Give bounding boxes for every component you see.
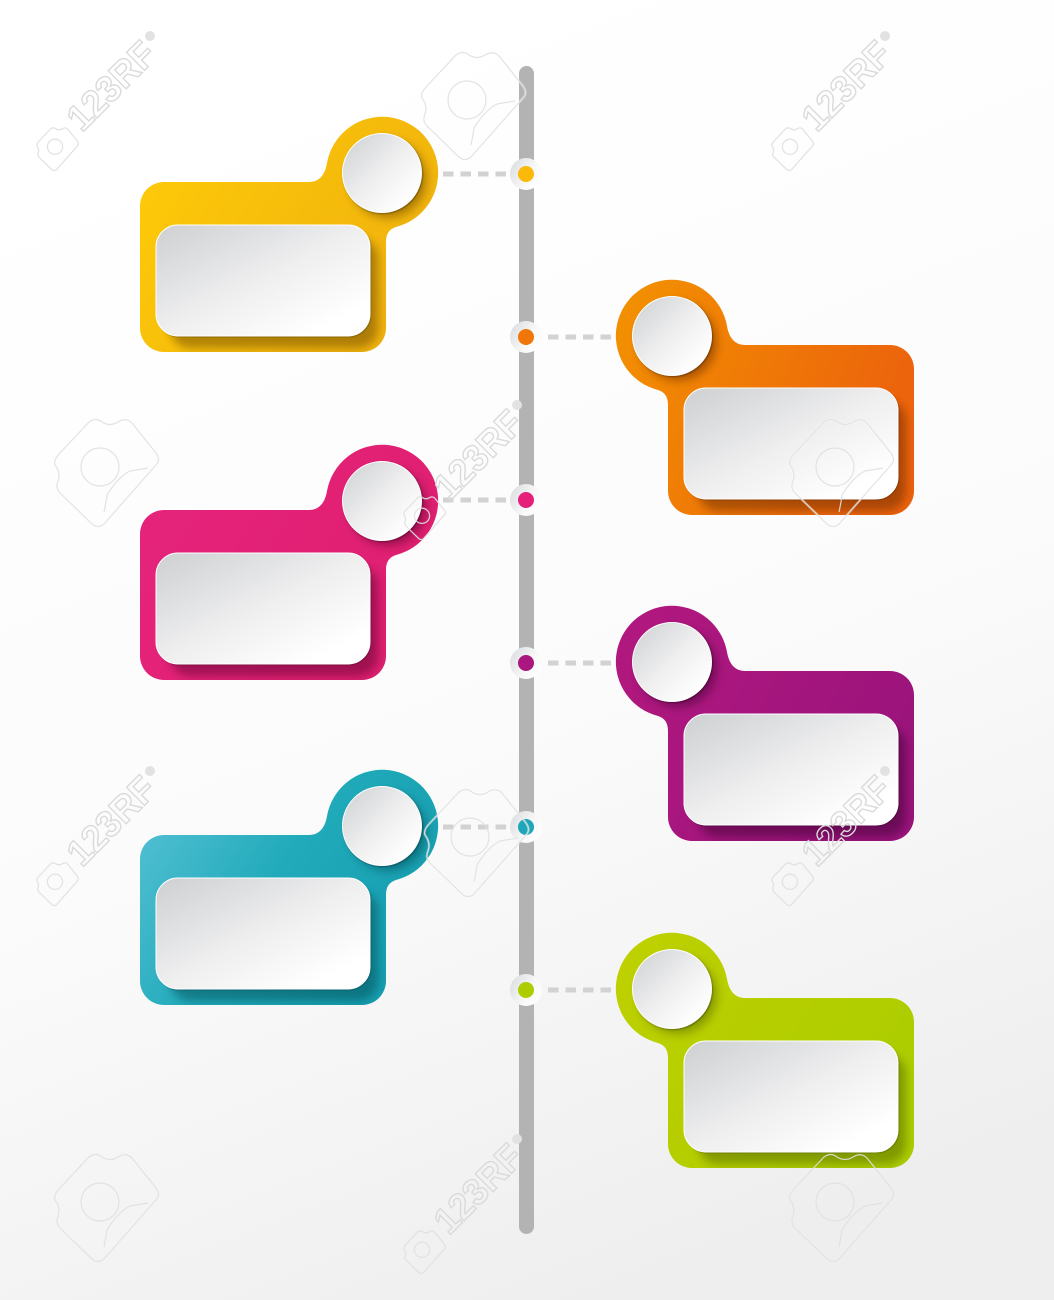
connector: orange: [548, 334, 612, 340]
watermark: stamp centre lower: [425, 790, 528, 896]
watermark: logo lower left: [37, 766, 164, 906]
watermark: stamp top centre: [422, 52, 526, 160]
panel: teal card: [140, 770, 438, 1005]
panel: orange card: [616, 280, 914, 515]
panel: pink card: [140, 445, 438, 680]
text box: pink: [156, 553, 370, 664]
text box: purple: [684, 714, 898, 825]
watermark: stamp bottom right: [790, 1154, 894, 1262]
watermark: logo centre: 123RF: [426, 402, 531, 508]
number circle: purple: [632, 622, 712, 702]
watermark: logo top right: 123RF: [794, 33, 899, 139]
watermark: stamp left: [55, 420, 158, 526]
timeline node: orange: [510, 321, 542, 353]
timeline node: purple: [510, 647, 542, 679]
text box: yellow: [156, 225, 370, 336]
connector: green: [548, 988, 612, 992]
timeline node: yellow: [510, 158, 542, 190]
text box: green: [684, 1041, 898, 1152]
connector: yellow: [443, 172, 507, 176]
watermark: logo top left: [37, 31, 164, 171]
timeline node: green: [510, 974, 542, 1006]
watermark: stamp bottom left: [55, 1154, 158, 1262]
timeline node: pink: [510, 484, 542, 516]
text box: teal: [156, 878, 370, 989]
number circle: yellow: [342, 134, 422, 212]
timeline node: teal: [510, 811, 542, 843]
connector: teal: [443, 824, 507, 830]
panel: green card: [616, 933, 914, 1168]
watermark: logo lower left: 123RF: [59, 768, 164, 874]
number circle: teal: [342, 786, 422, 866]
number circle: orange: [632, 296, 712, 376]
watermark: logo bottom centre: 123RF: [426, 1136, 531, 1242]
number circle: green: [632, 950, 712, 1028]
text box: orange: [684, 388, 898, 499]
number circle: pink: [342, 462, 422, 540]
watermark: stamp right: [790, 420, 894, 526]
watermark: logo lower right: [772, 766, 899, 906]
watermark: logo top right: [772, 31, 899, 171]
watermark: logo lower right: 123RF: [794, 768, 899, 874]
watermark: logo centre: [404, 400, 531, 540]
panel: yellow card: [140, 117, 438, 352]
vertical timeline bar: [519, 66, 534, 1234]
watermark: logo bottom centre: [404, 1134, 531, 1274]
connector: purple: [548, 660, 612, 666]
panel: purple card: [616, 606, 914, 841]
connector: pink: [443, 498, 507, 502]
watermark: logo top left: 123RF: [59, 33, 164, 139]
